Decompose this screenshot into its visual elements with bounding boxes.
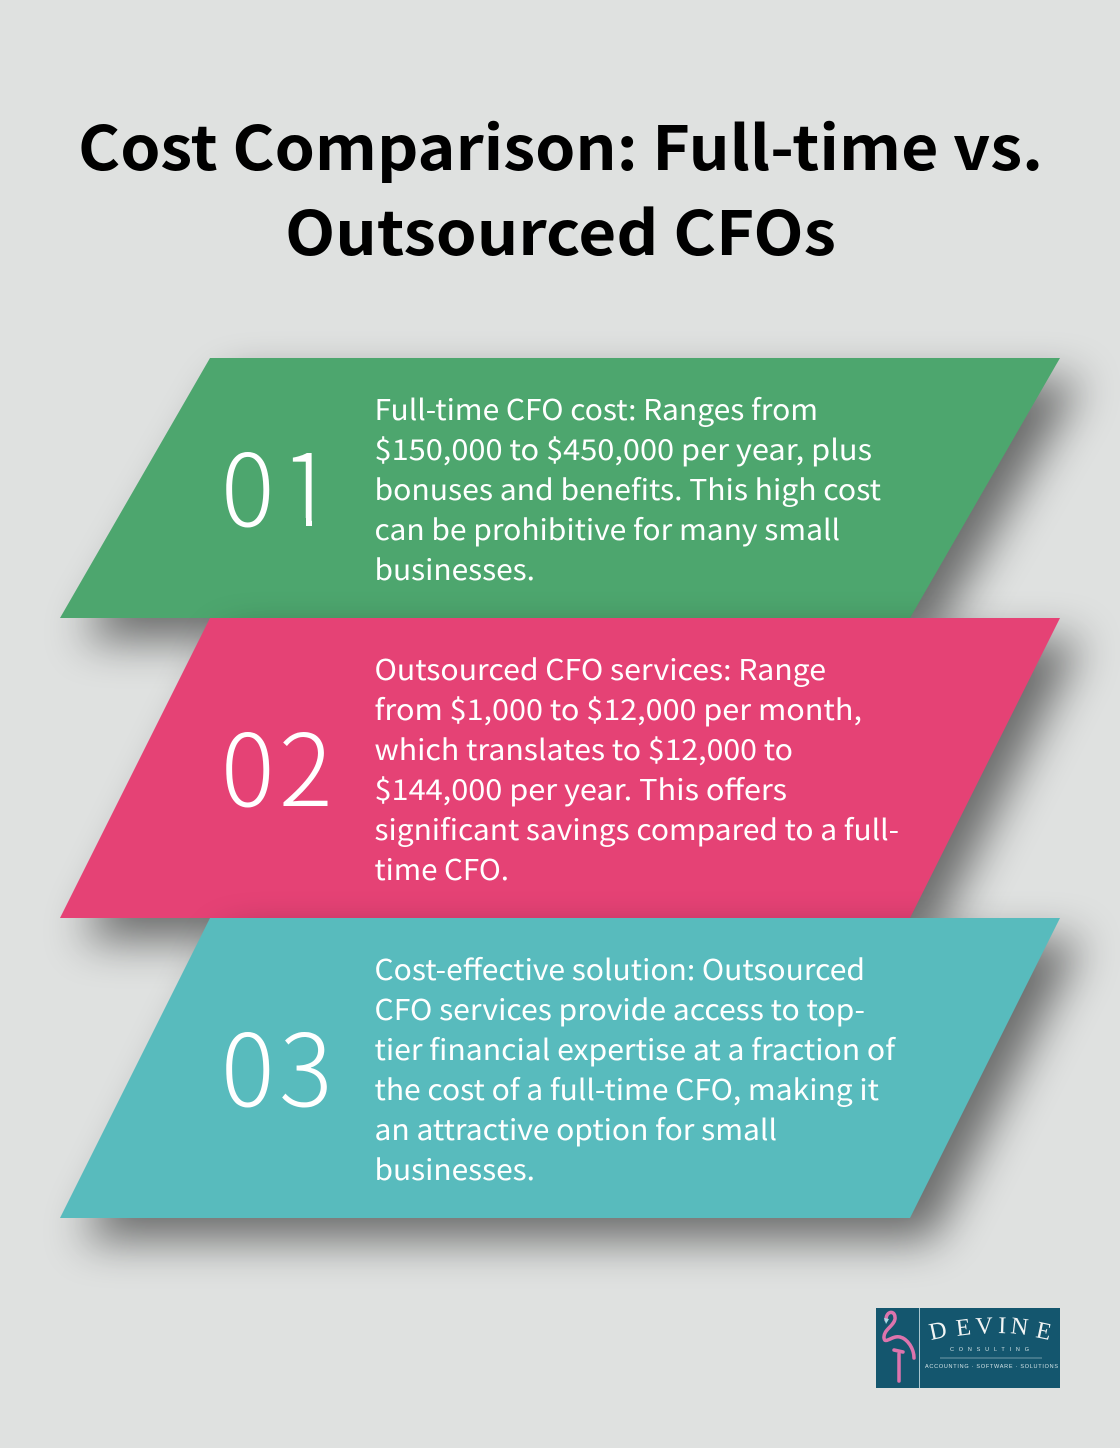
number 02: 02 <box>221 690 332 835</box>
text: outsourced CFO services: $144,000 per year. This offers <box>374 768 787 809</box>
title: Outsourced CFOs <box>285 184 836 273</box>
logo tagline: CONSULTING <box>950 1347 1029 1353</box>
text: outsourced CFO services: which translates to $12,000 to <box>374 728 793 769</box>
text: outsourced CFO services <box>374 648 899 889</box>
logo: Devine Consulting <box>876 1308 1060 1388</box>
panel: step 03 cost-effective solution <box>60 918 1082 1240</box>
text: outsourced CFO services: significant savings compared to a full- <box>374 808 899 849</box>
panel: step 01 full-time CFO cost <box>60 358 1082 640</box>
icon: flamingo <box>884 1312 914 1381</box>
text: full-time CFO cost: $150,000 to $450,000 per year, plus <box>374 428 872 469</box>
panel: step 02 outsourced CFO services <box>60 618 1082 940</box>
text: cost-effective solution: tier financial expertise at a fraction of <box>374 1028 897 1069</box>
text: outsourced CFO services: from $1,000 to $12,000 per month, <box>374 688 862 729</box>
number 03: 03 <box>221 990 332 1135</box>
text: cost-effective solution <box>374 948 897 1189</box>
logo tagline: ACCOUNTING · SOFTWARE · SOLUTIONS <box>925 1364 1058 1370</box>
text: cost-effective solution: CFO services provide access to top- <box>374 988 865 1029</box>
logo wordmark: E <box>1034 1317 1054 1346</box>
text: cost-effective solution: an attractive option for small <box>374 1108 777 1149</box>
text: full-time CFO cost: can be prohibitive for many small <box>374 508 840 549</box>
logo wordmark: V <box>975 1313 994 1340</box>
text: cost-effective solution: businesses. <box>374 1148 535 1189</box>
logo wordmark: N <box>1009 1313 1030 1341</box>
logo wordmark: D <box>927 1317 949 1346</box>
logo wordmark <box>927 1313 1054 1346</box>
logo wordmark: E <box>955 1314 972 1342</box>
logo tagline <box>925 1347 1058 1370</box>
text: full-time CFO cost: bonuses and benefits. This high cost <box>374 468 881 509</box>
logo wordmark: I <box>998 1313 1007 1339</box>
text: cost-effective solution: Cost-effective solution: Outsourced <box>374 948 865 989</box>
number 01: 01 <box>221 410 334 555</box>
text: outsourced CFO services: time CFO. <box>374 848 509 889</box>
text: cost-effective solution: the cost of a full-time CFO, making it <box>374 1068 879 1109</box>
text: outsourced CFO services: Outsourced CFO services: Range <box>374 648 826 689</box>
title: Cost Comparison: Full-time vs. <box>78 99 1043 188</box>
text: full-time CFO cost: Full-time CFO cost: Ranges from <box>374 388 818 429</box>
text: full-time CFO cost: businesses. <box>374 548 535 589</box>
text: full-time CFO cost <box>374 388 881 589</box>
title <box>78 99 1043 273</box>
